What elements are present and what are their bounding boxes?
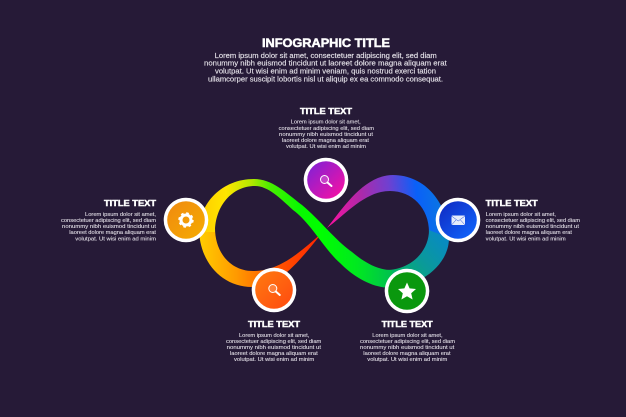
node: gear [164, 198, 208, 242]
text block: left: consectetuer adipiscing elit, sed diam [61, 218, 157, 224]
text block: bottom right: volutpat. Ut wisi enim ad minim [367, 357, 448, 363]
ribbon: teal lower right [386, 230, 449, 288]
text block: top: nonummy nibh euismod tincidunt ut [279, 132, 374, 138]
text block: top: TITLE TEXT [300, 106, 353, 116]
title: INFOGRAPHIC TITLE [262, 36, 390, 50]
text block: right: volutpat. Ut wisi enim ad minim [486, 236, 566, 242]
intro text block: volutpat. Ut wisi enim ad minim veniam, quis nostrud exerci tation [215, 67, 436, 76]
text block: bottom right [360, 319, 456, 363]
node: search orange [252, 268, 296, 312]
text block: bottom left: laoreet dolore magna aliquam erat [230, 351, 318, 357]
text block: left: Lorem ipsum dolor sit amet, [85, 212, 156, 218]
infinity ribbon [199, 175, 449, 288]
node: star [385, 269, 429, 313]
text block: bottom left: nonummy nibh euismod tincidunt ut [227, 345, 322, 351]
text block: bottom right: TITLE TEXT [382, 319, 434, 329]
text block: top: consectetuer adipiscing elit, sed diam [279, 126, 375, 132]
intro text block: nonummy nibh euismod tincidunt ut laoreet dolore magna aliquam erat [204, 59, 447, 68]
ribbon: red orange lower left [199, 228, 322, 287]
text block: right: Lorem ipsum dolor sit amet, [486, 212, 556, 218]
icon: magnifier [320, 176, 332, 186]
text block: right: nonummy nibh euismod tincidunt ut [486, 224, 580, 230]
text block: bottom right: consectetuer adipiscing elit, sed diam [360, 339, 456, 345]
text block: bottom right: laoreet dolore magna aliquam erat [363, 351, 451, 357]
text block: left: laoreet dolore magna aliquam erat [69, 230, 157, 236]
icon: gear [179, 213, 193, 227]
text block: left: TITLE TEXT [104, 198, 157, 208]
text block: bottom left: consectetuer adipiscing elit, sed diam [226, 339, 322, 345]
intro text block: ullamcorper suscipit lobortis nisl ut aliquip ex ea commodo consequat. [208, 75, 443, 84]
icon: star [398, 282, 416, 300]
text block: bottom left: TITLE TEXT [248, 319, 301, 329]
text block: left: nonummy nibh euismod tincidunt ut [62, 224, 157, 230]
text block: right: consectetuer adipiscing elit, sed diam [486, 218, 581, 224]
text block: bottom right: Lorem ipsum dolor sit amet, [372, 333, 443, 339]
text block: top [279, 106, 375, 150]
icon: magnifier [269, 284, 280, 295]
text block: top: laoreet dolore magna aliquam erat [282, 138, 370, 144]
text block: right: laoreet dolore magna aliquam erat [486, 230, 573, 236]
text block: left: volutpat. Ut wisi enim ad minim [75, 236, 157, 242]
intro text block [204, 51, 447, 84]
text block: right: TITLE TEXT [486, 198, 539, 208]
text block: bottom left [226, 319, 322, 363]
intro text block: Lorem ipsum dolor sit amet, consectetuer adipiscing elit, sed diam [215, 51, 437, 60]
text block: bottom left: Lorem ipsum dolor sit amet, [239, 333, 309, 339]
icon: envelope [452, 216, 465, 225]
text block: right [486, 198, 581, 242]
node: search purple [304, 158, 348, 202]
node: mail [436, 198, 480, 242]
text block: top: Lorem ipsum dolor sit amet, [291, 120, 361, 126]
ribbon: magenta to blue upper right [327, 175, 449, 240]
ribbon: yellow to green band [199, 179, 392, 288]
text block: top: volutpat. Ut wisi enim ad minim [286, 144, 367, 150]
text block: bottom right: nonummy nibh euismod tincidunt ut [360, 345, 455, 351]
text block: left [61, 198, 157, 242]
text block: bottom left: volutpat. Ut wisi enim ad minim [234, 357, 315, 363]
